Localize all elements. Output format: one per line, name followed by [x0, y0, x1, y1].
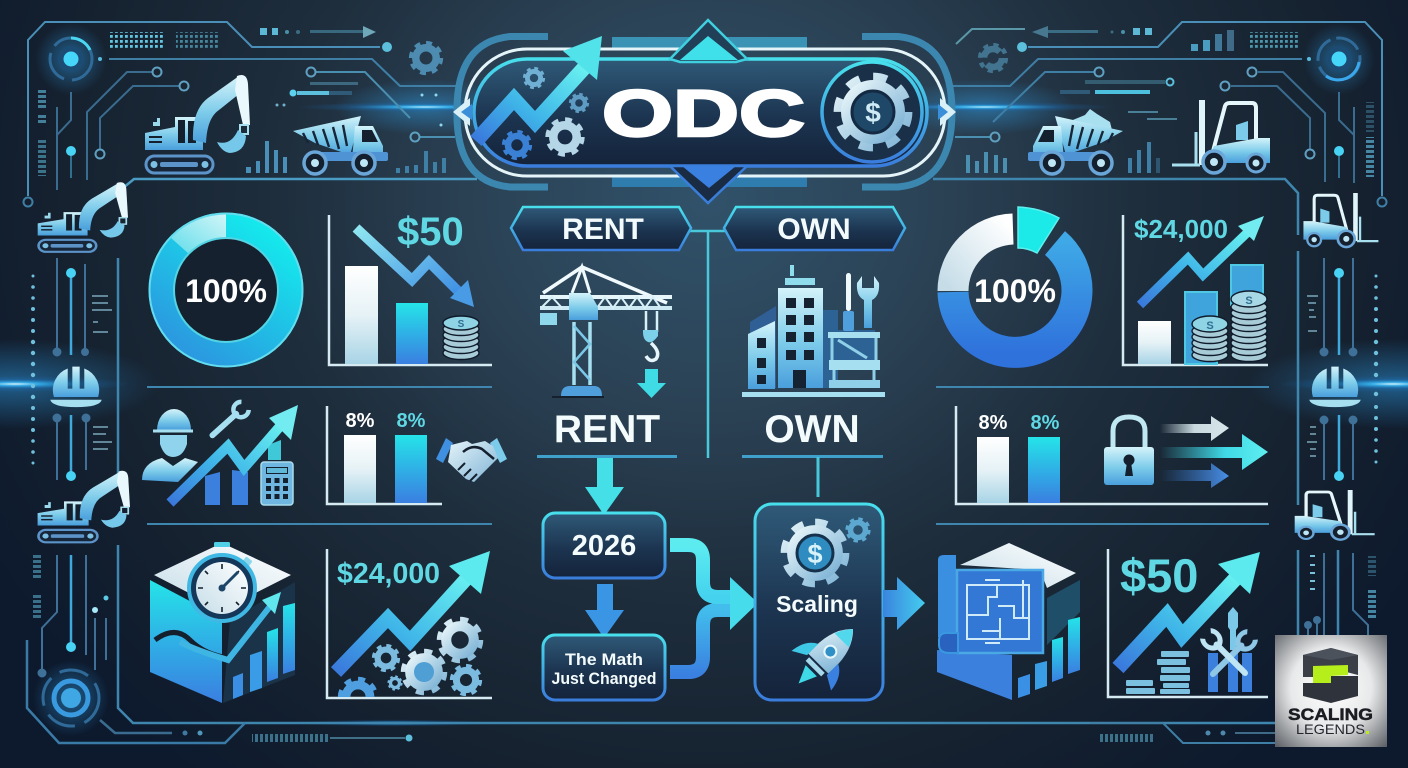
chart: 8 percent left: 8%: [397, 410, 426, 432]
growth arrow row 2: [170, 405, 298, 505]
main frame: [27, 179, 1298, 743]
chart: $50 rising with tools: $50: [1120, 549, 1198, 602]
box: The Math Just Changed: The Math: [565, 650, 643, 669]
chart: 8 percent right: 8%: [979, 412, 1008, 434]
stopwatch: [189, 542, 255, 621]
mini bars: right of truck: [396, 151, 446, 173]
donut: right 100%: 100%: [974, 273, 1056, 309]
icon: tower crane: [540, 267, 672, 398]
icon: dump truck right: [1028, 109, 1123, 174]
icon: padlock: [1104, 417, 1154, 485]
mini bars: right of right truck: [1128, 142, 1160, 173]
connector: own to scaling: [816, 457, 820, 497]
underline rent: [537, 455, 677, 458]
box: 2026: [543, 513, 665, 578]
circuit frame: top right: [953, 22, 1386, 206]
donut: left 100%: 100%: [185, 273, 267, 309]
data readouts: top right: [1032, 26, 1300, 120]
micro readouts: right: [1366, 102, 1376, 620]
target icon: top right: [1303, 23, 1375, 95]
gears cluster: [338, 616, 484, 697]
divider right 2: [936, 523, 1269, 525]
growth arrow: [476, 36, 602, 141]
icon: calculator: [261, 462, 293, 505]
arrow: rent to 2026: [585, 458, 624, 515]
icon: handshake: [436, 438, 507, 482]
arrow: scaling to blueprint: [883, 577, 925, 630]
mini bars: left of truck: [246, 141, 287, 173]
footer chain: bottom right: [1090, 723, 1275, 743]
circuit lines: left column upper: [54, 146, 112, 481]
label: OWN: OWN: [764, 408, 860, 451]
underline own: [742, 455, 883, 458]
header tag: OWN: OWN: [777, 213, 851, 246]
chart: 8 percent left: [327, 406, 442, 504]
chart: $50 falling: [329, 210, 492, 365]
icon: coin stacks: S: [1245, 295, 1253, 307]
icon: excavator left upper: [38, 182, 128, 252]
icon: dollar gear: $: [865, 97, 881, 128]
chart: $50 falling: $50: [397, 210, 464, 254]
divider right 1: [936, 386, 1269, 388]
icon: dump truck left: [293, 116, 388, 174]
icon: cube with stopwatch: [150, 542, 295, 703]
title text: ODC: [602, 76, 805, 150]
chart: $24,000 gears: $24,000: [337, 558, 440, 590]
arrows: merge into scaling: [670, 545, 758, 672]
stacks: [1126, 651, 1190, 694]
tools: [1201, 607, 1257, 692]
top chevron: [670, 20, 747, 62]
box: Scaling: [755, 504, 883, 703]
icon: forklift right upper: [1303, 193, 1378, 247]
icon: excavator left lower: [38, 471, 130, 542]
micro readouts: left: [33, 90, 46, 620]
target icon: top left: [35, 23, 107, 95]
dot column: left: [31, 274, 35, 464]
logo: Scaling Legends: [1275, 635, 1387, 747]
small gears: [504, 69, 588, 158]
header tag: OWN: [724, 207, 905, 250]
icon: blueprint: [937, 543, 1080, 700]
circuit frame: top left: [24, 22, 460, 206]
icon: broken gear top right: [980, 45, 1006, 71]
floor plan: [967, 580, 1029, 643]
icon: coins: S: [458, 319, 465, 330]
plaque frame: [453, 36, 956, 187]
logo mark: [1303, 648, 1358, 703]
data readouts: top left: [110, 26, 442, 126]
box: Scaling: Scaling: [776, 591, 858, 617]
plaque body: [474, 59, 927, 166]
chart: 8 percent right: 8%: [1031, 412, 1060, 434]
arrows: lock outflow: [1160, 416, 1268, 488]
icon: rocket: [779, 609, 873, 703]
header tag: RENT: [511, 207, 691, 250]
icon: dollar gear: [822, 62, 922, 162]
icon: forklift right lower: [1295, 490, 1375, 540]
icon: buildings and tools: [742, 265, 885, 397]
icon: forklift: [1172, 100, 1270, 173]
icon: coin stacks: S: [1206, 320, 1214, 332]
chart: 8 percent right: [956, 406, 1268, 504]
donut: left 100%: [150, 213, 302, 366]
mini bars: left of right truck: [966, 152, 1007, 173]
footer chain: bottom left: [182, 730, 412, 742]
chart: $24,000 rising with coins: [1123, 214, 1268, 365]
arrow: 2026 to math: [585, 584, 624, 638]
icon: coins: [443, 316, 479, 360]
header tag: RENT: RENT: [562, 213, 644, 246]
title plaque: [453, 20, 956, 203]
icon: worker: [142, 409, 198, 482]
bottom chevron: [670, 166, 747, 203]
box: The Math Just Changed: [543, 635, 665, 700]
icon: excavator: [145, 75, 250, 173]
circuit lines: left column lower: [38, 555, 108, 676]
icon: helmet left: [50, 367, 102, 407]
divider left 2: [147, 523, 492, 525]
box: The Math Just Changed: Just Changed: [552, 670, 656, 688]
chart: 8 percent left: 8%: [346, 410, 375, 432]
connector: rent and own headers: [690, 231, 725, 458]
box: Scaling: $: [807, 539, 823, 569]
box: 2026: 2026: [572, 530, 636, 562]
chart: $50 rising with tools: [1108, 549, 1268, 697]
chart: $24,000 rising with coins: $24,000: [1134, 214, 1228, 244]
target icon: bottom left: [33, 660, 109, 736]
chart: $24,000 gears: [327, 549, 492, 714]
icon: coin stacks: [1192, 291, 1267, 362]
logo: Scaling Legends: LEGENDS: [1296, 721, 1365, 737]
icon: wrench diagonal: [205, 400, 250, 443]
donut: right 100%: [953, 207, 1077, 352]
divider left 1: [147, 386, 492, 388]
logo: Scaling Legends: SCALING: [1288, 705, 1373, 724]
dot column: right: [1374, 274, 1378, 464]
icon: gear top left: [411, 43, 441, 73]
icon: helmet right: [1309, 367, 1361, 407]
label: RENT: RENT: [554, 408, 660, 451]
circuit lines: right column: [1305, 146, 1368, 635]
